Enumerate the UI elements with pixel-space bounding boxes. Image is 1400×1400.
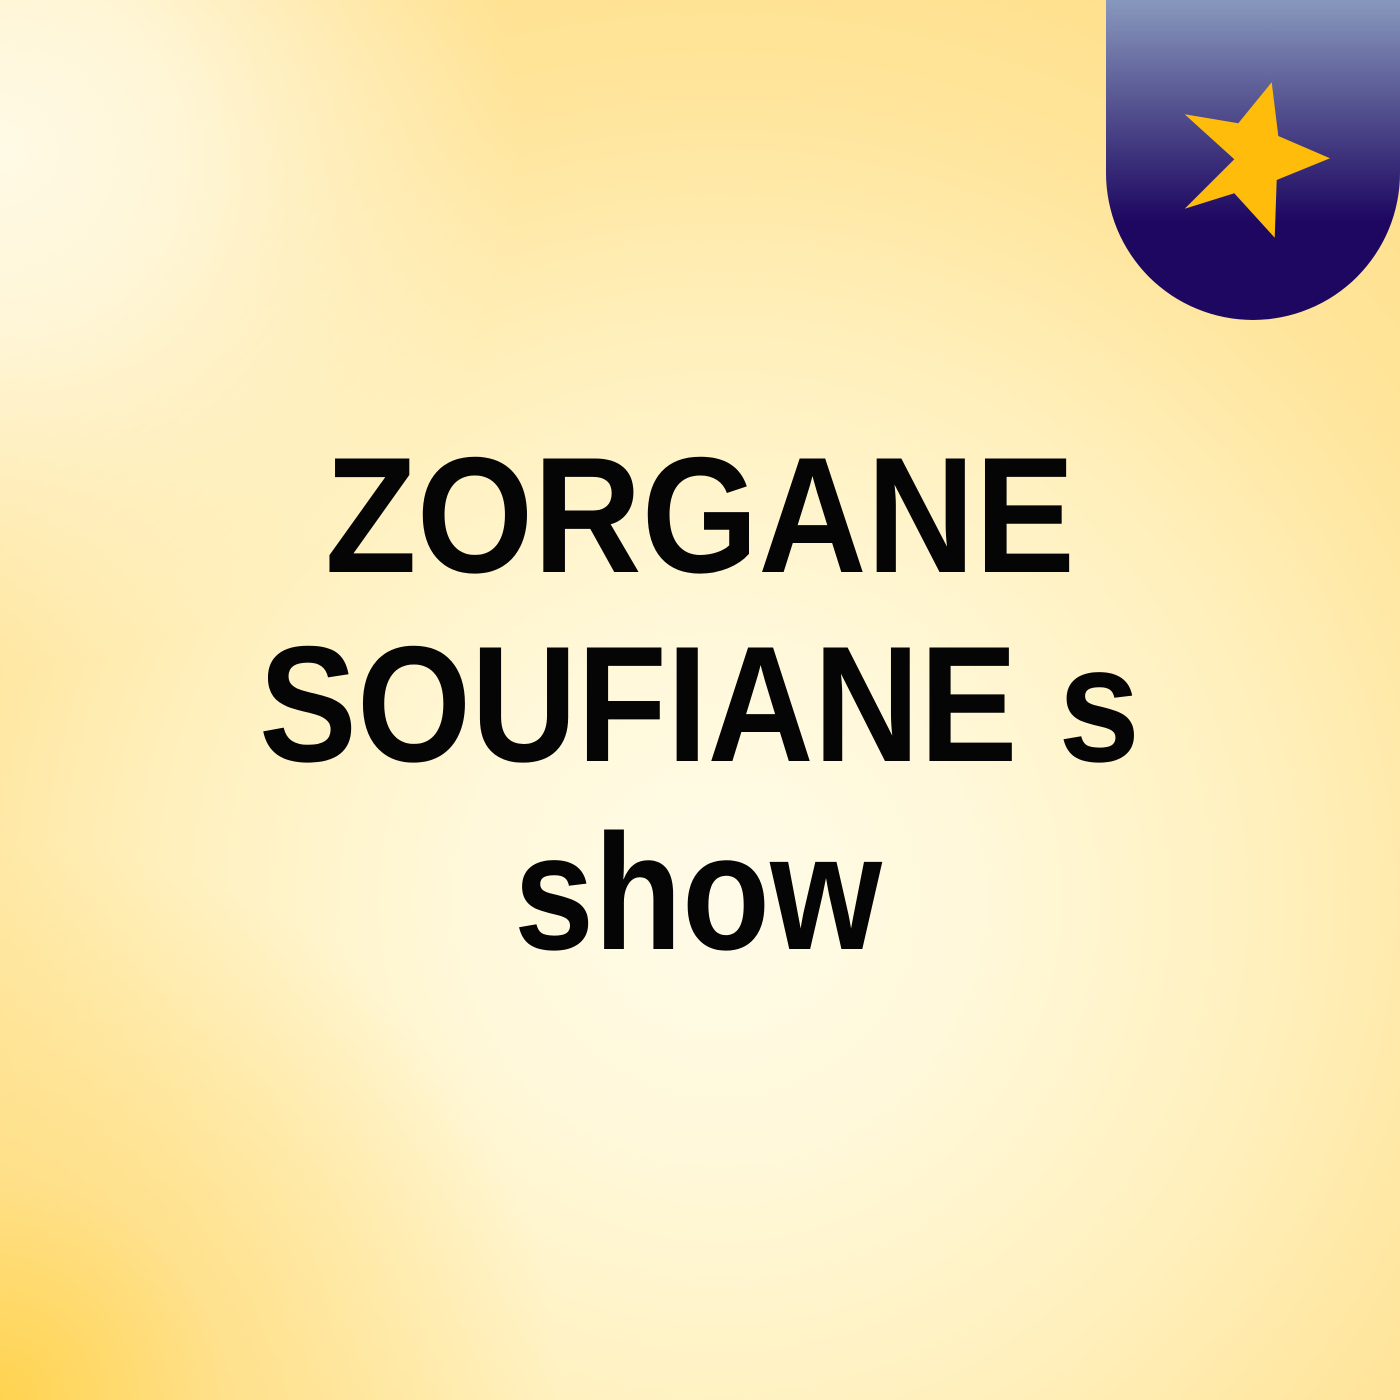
- title: show: [514, 800, 883, 984]
- title: SOUFIANE s: [259, 612, 1140, 796]
- icon: star: [1185, 82, 1330, 238]
- badge with star: [1106, 0, 1400, 320]
- badge shield: [1106, 0, 1400, 320]
- title: ZORGANE: [325, 423, 1075, 607]
- title: [259, 423, 1140, 984]
